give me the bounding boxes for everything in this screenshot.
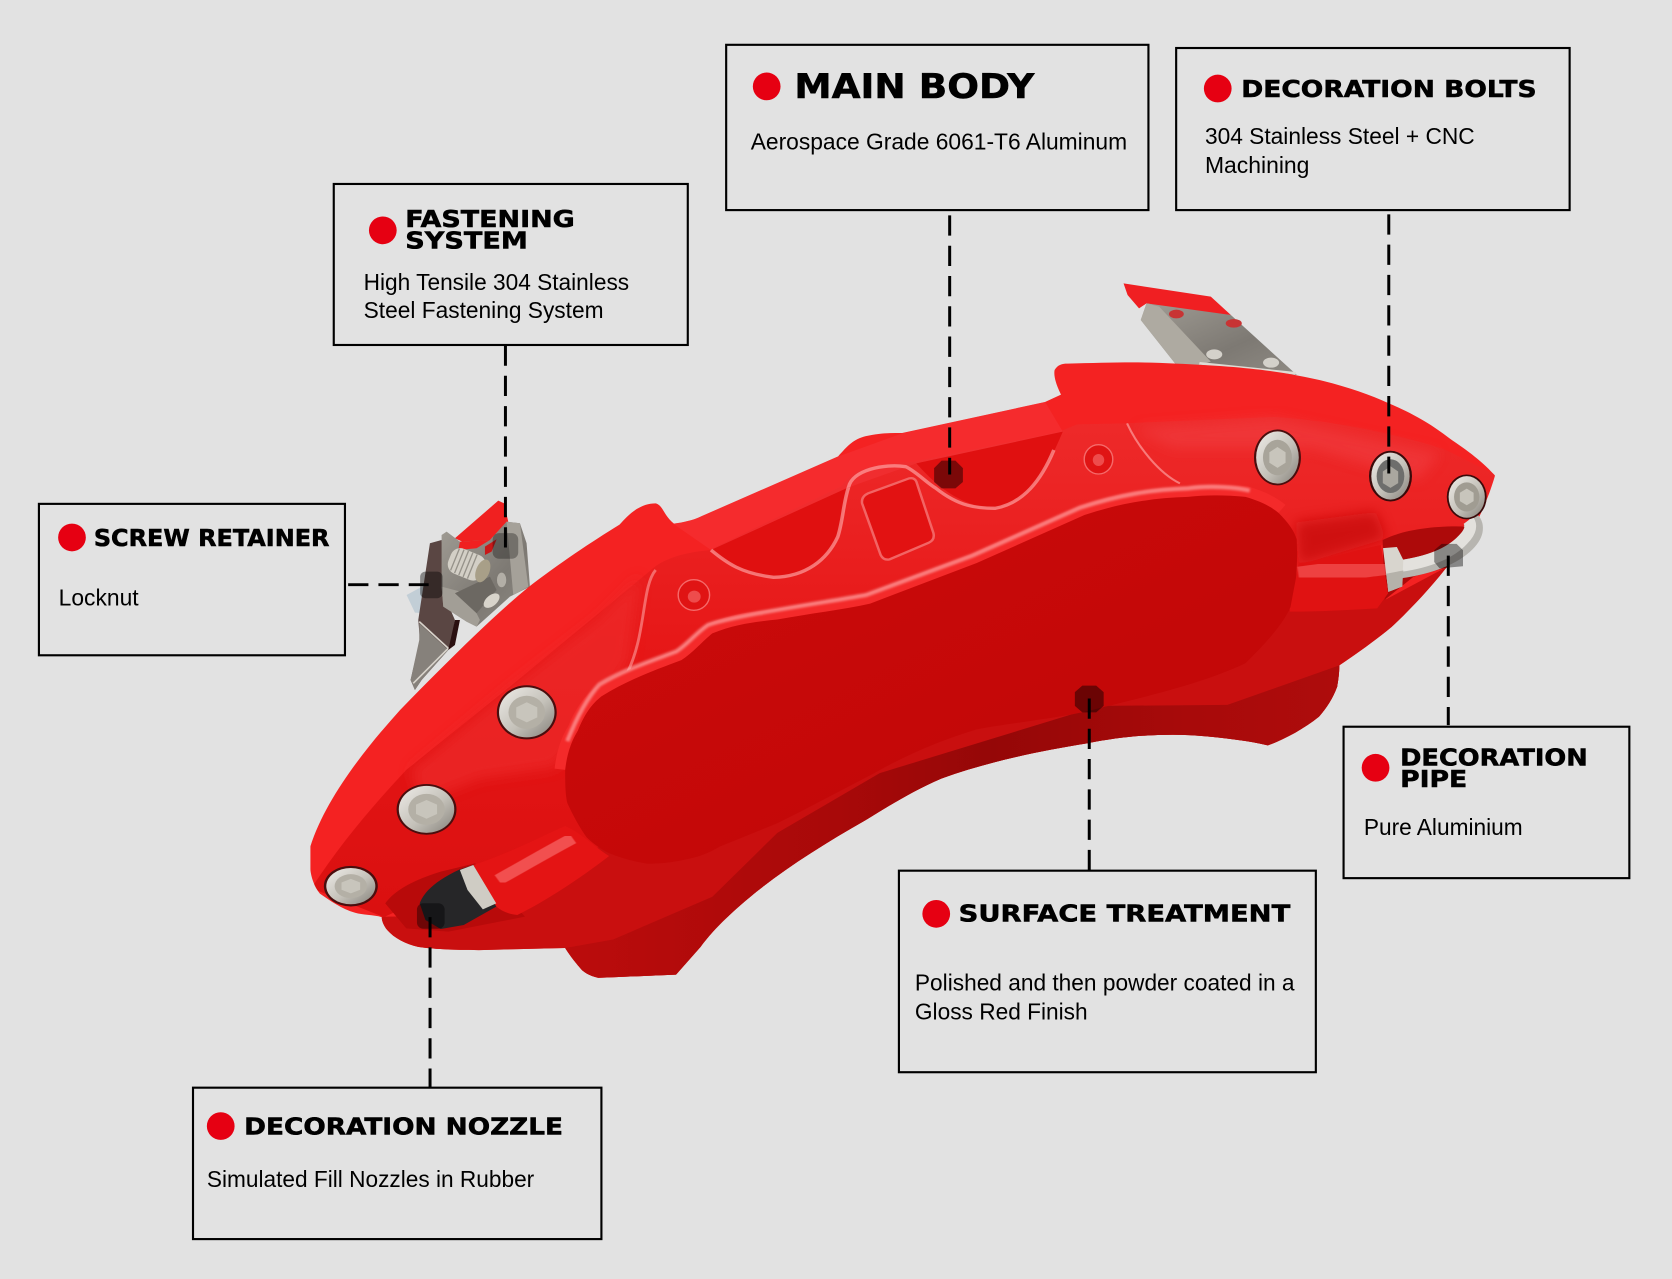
bolt 1 <box>497 685 557 739</box>
heading: SCREW RETAINER <box>94 524 329 552</box>
rear wing <box>565 665 1354 992</box>
panel: fastening system <box>334 184 688 345</box>
marker: screw retainer <box>420 572 443 598</box>
red bullet <box>369 216 397 244</box>
panel: decoration bolts <box>1176 48 1570 210</box>
red bullet <box>753 73 781 100</box>
top rim lit strip <box>674 402 1063 550</box>
connector: surface treatment <box>1088 698 1091 870</box>
panel: screw retainer <box>39 504 345 655</box>
bolt 4 <box>1254 430 1301 485</box>
heading: DECORATION NOZZLE <box>244 1113 563 1141</box>
marker: surface treatment <box>1075 686 1104 712</box>
red bullet <box>207 1112 235 1140</box>
bolt 5 <box>1369 451 1412 501</box>
description: High Tensile 304 Stainless <box>364 269 629 295</box>
lower band under the cover plate <box>363 565 1472 992</box>
pockets, boss and dimples <box>627 423 1180 673</box>
heading: SURFACE TREATMENT <box>959 899 1290 927</box>
nozzle recess <box>385 826 609 932</box>
red bullet <box>1204 75 1232 102</box>
top stainless steel clip <box>1124 283 1297 375</box>
marker: decoration pipe <box>1434 544 1463 568</box>
description: Aerospace Grade 6061-T6 Aluminum <box>751 128 1127 154</box>
connector: decoration pipe <box>1447 556 1450 725</box>
heading line 2: PIPE <box>1400 765 1467 793</box>
heading line 1: DECORATION <box>1400 744 1588 772</box>
connector: decoration nozzle <box>429 917 431 1088</box>
bolt 6 <box>1447 474 1487 519</box>
rib around the cover plate <box>565 495 1279 770</box>
bolt 2 <box>397 784 456 835</box>
panel: decoration pipe <box>1344 727 1629 878</box>
heading: DECORATION BOLTS <box>1241 75 1537 103</box>
red bullet <box>922 900 950 928</box>
heading line 1: FASTENING <box>405 205 575 233</box>
connector: screw retainer <box>348 583 429 586</box>
heading line 2: SYSTEM <box>405 226 528 254</box>
connector: decoration bolts <box>1387 214 1390 473</box>
left upper lit panel <box>415 596 632 790</box>
description: Pure Aluminium <box>1364 814 1523 840</box>
red bullet <box>58 524 86 551</box>
description: 304 Stainless Steel + CNC <box>1205 123 1475 149</box>
description line 2: Gloss Red Finish <box>915 998 1088 1024</box>
description: Polished and then powder coated in a <box>915 970 1295 996</box>
description line 2: Steel Fastening System <box>364 297 604 323</box>
connector: main body <box>948 215 951 475</box>
connector: fastening system <box>504 346 507 548</box>
marker: fastening system <box>493 533 518 559</box>
panel: decoration nozzle <box>193 1088 601 1239</box>
side face <box>314 473 1495 916</box>
cover plate <box>565 495 1297 864</box>
left stainless steel clip with screw and locknut <box>407 501 530 690</box>
panel: main body <box>726 45 1148 210</box>
right lower shadow on face <box>1296 512 1386 565</box>
caliper body <box>299 352 1504 992</box>
rib glints <box>567 487 1250 741</box>
marker: decoration nozzle <box>417 903 445 929</box>
right upper lit panel <box>1153 420 1432 478</box>
red bullet <box>1362 754 1389 782</box>
heading: MAIN BODY <box>794 67 1036 107</box>
silver decoration pipe <box>1383 519 1474 592</box>
description: Simulated Fill Nozzles in Rubber <box>207 1166 535 1192</box>
description line 2: Machining <box>1205 152 1309 178</box>
panel: surface treatment <box>899 871 1316 1072</box>
bolt 3 <box>324 866 378 906</box>
right pipe recess <box>1290 526 1468 612</box>
marker: main body <box>934 461 963 488</box>
description: Locknut <box>59 585 139 611</box>
illustration: red brake caliper cover <box>299 283 1504 992</box>
